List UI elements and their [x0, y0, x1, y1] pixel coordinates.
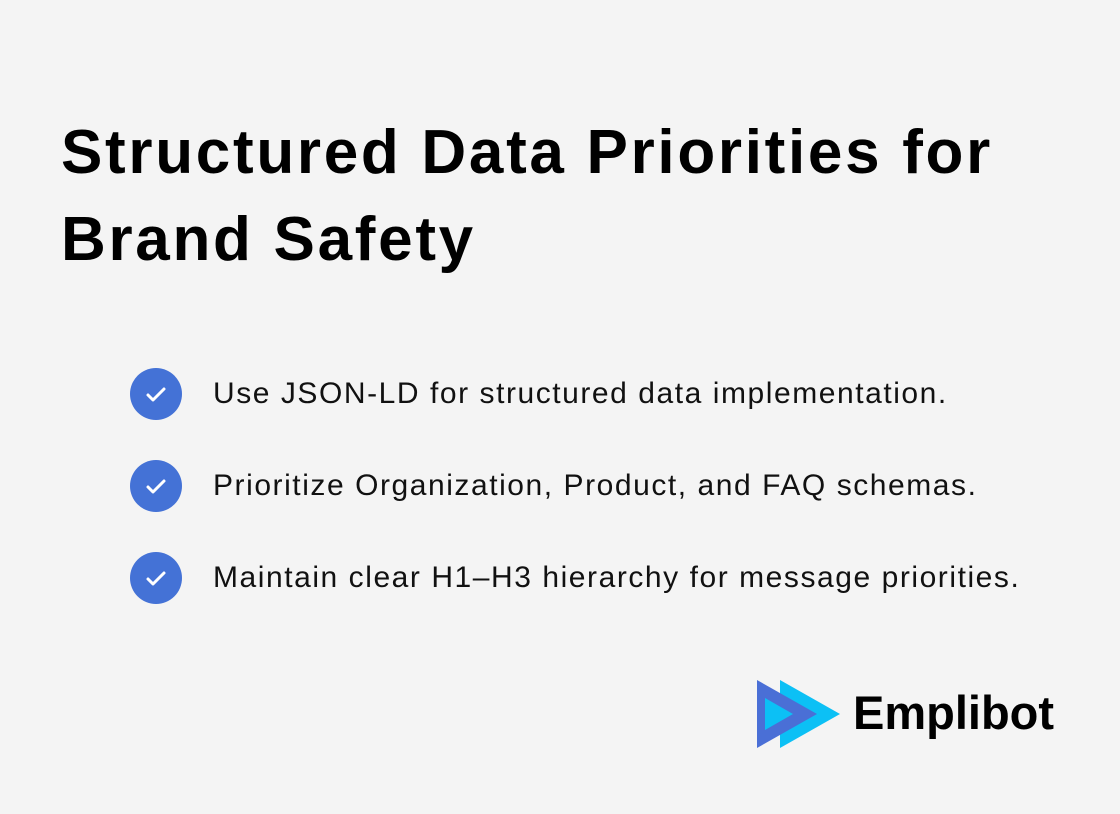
title: Brand Safety: [61, 205, 476, 274]
text 2: Prioritize Organization, Product, and FAQ schemas.: [213, 469, 977, 502]
item 3: [130, 552, 1020, 604]
logo text: Emplibot: [853, 686, 1054, 739]
title: Structured Data Priorities for: [61, 118, 993, 187]
icon: check: [130, 368, 182, 420]
icon: check: [130, 460, 182, 512]
icon: check: [130, 552, 182, 604]
logo: [757, 680, 1054, 748]
text 1: Use JSON-LD for structured data implementation.: [213, 377, 948, 410]
item 2: [130, 460, 977, 512]
item 1: [130, 368, 948, 420]
icon: logo triangles: [757, 680, 840, 748]
text 3: Maintain clear H1–H3 hierarchy for message priorities.: [213, 561, 1020, 594]
title: [61, 118, 993, 274]
